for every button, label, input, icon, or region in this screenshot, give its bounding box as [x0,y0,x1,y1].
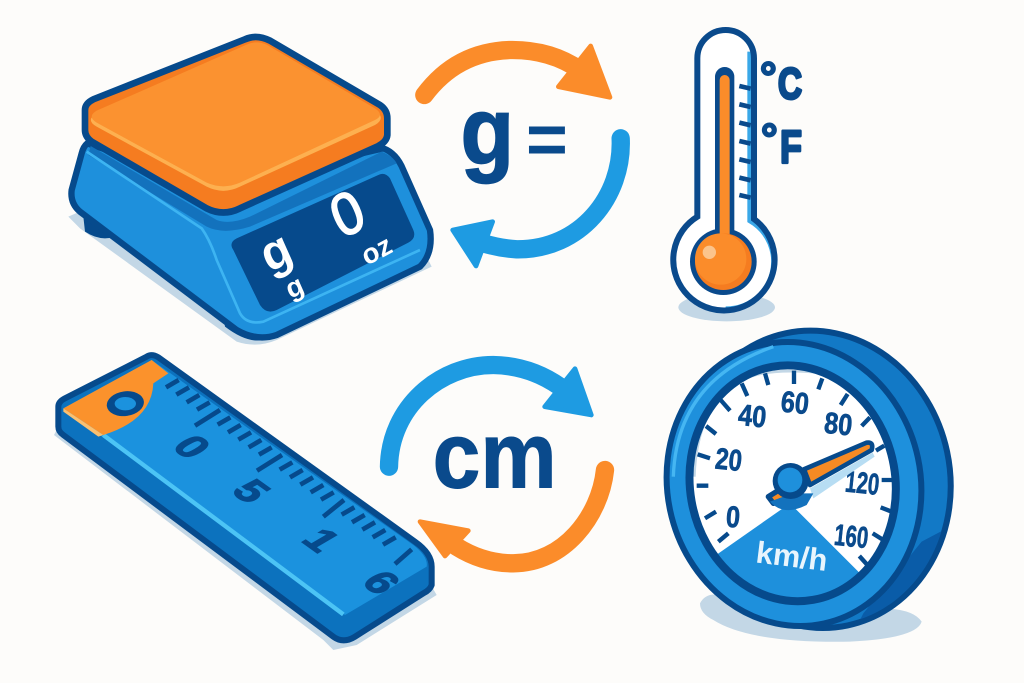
orange weighing pad [85,37,387,212]
dial numbers: 120 [844,465,881,502]
dial numbers: 40 [737,399,768,435]
icon: thermometer [673,30,802,321]
arrows: grams conversion cycle [424,46,621,266]
scale display: g [251,219,300,283]
scale display [231,174,414,312]
arrows: centimetre conversion cycle [389,365,605,563]
dial numbers [714,385,881,555]
ruler numbers [163,429,410,601]
dial numbers: 0 [725,501,741,535]
ruler ticks [166,380,412,564]
km/h wedge: km/h [754,536,829,578]
km/h wedge [718,509,859,598]
arrow: orange [420,470,605,563]
needle and hub [768,443,875,510]
ruler numbers: 0 [163,429,221,465]
gauge dial face [671,349,914,618]
unit labels: C [778,60,802,108]
label: g=: = [526,99,568,179]
ruler hole [105,389,146,418]
dial numbers: 160 [833,519,870,555]
temperature scale ticks [739,86,751,198]
ruler numbers: 6 [352,564,410,601]
icon: speedometer [664,328,954,642]
unit labels: F [780,121,802,173]
unit labels [760,53,802,173]
arrow: blue [453,138,621,266]
dial numbers: 20 [714,442,744,478]
label: g=: g [461,78,514,184]
scale display: g [281,269,308,305]
icon: ruler [54,355,437,650]
scale display: 0 [320,176,374,251]
arrow: orange [424,46,610,97]
icon: kitchen scale [68,37,432,345]
label: cm: cm [433,403,557,507]
gauge body [655,306,978,653]
arrow: blue [389,365,591,467]
mercury column and bulb [690,77,757,295]
gauge bezel [640,318,948,650]
ruler numbers: 1 [292,522,350,558]
scale display: oz [357,229,396,271]
unit labels: ° [760,53,777,100]
ruler numbers: 5 [222,473,280,509]
dial ticks [697,371,893,566]
label: g= [461,78,568,184]
dial numbers: 60 [779,385,811,421]
dial numbers: 80 [823,407,854,443]
unit labels: ° [761,114,778,161]
